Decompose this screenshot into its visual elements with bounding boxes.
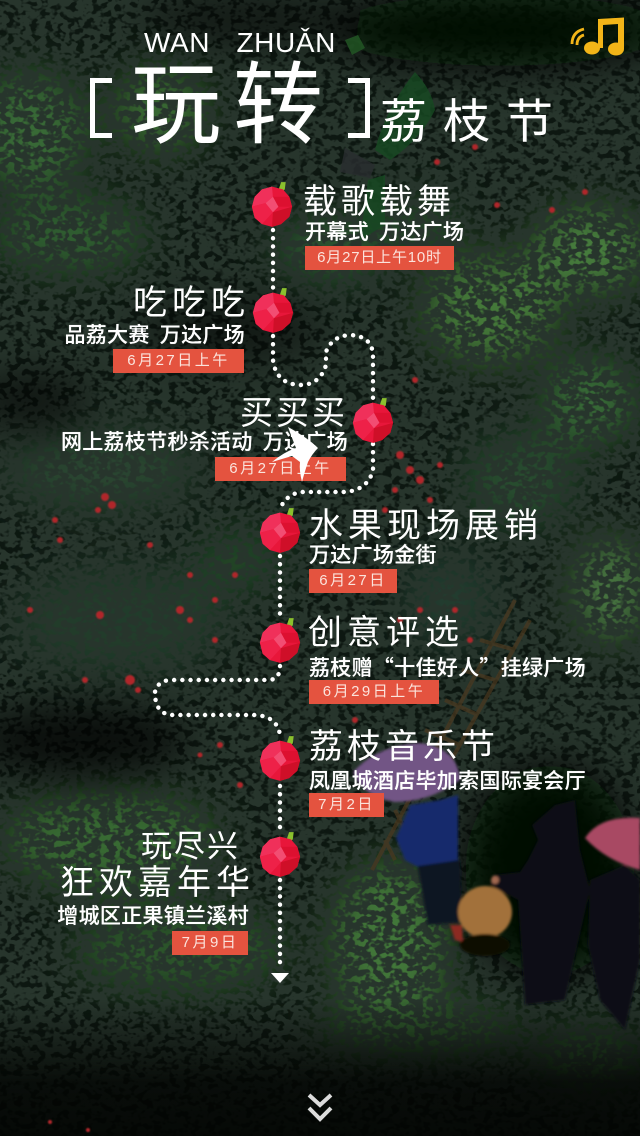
pickers and umbrellas [353,743,640,1030]
lychee icon [260,832,300,877]
lychee icon [260,736,300,781]
event 5 [260,614,586,704]
lychee icon [352,398,394,443]
event date: 6月27日上午 [229,460,332,477]
lychee icon [260,618,300,663]
title: 荔枝节: 荔枝节 [380,95,569,148]
event date [113,349,244,373]
event title: 水果现场展销 [309,507,543,545]
event date [215,457,346,481]
swallow icon [272,427,318,482]
event title: 载歌载舞 [303,183,455,221]
lychee icon [252,288,294,333]
event title: 吃吃吃 [133,284,250,322]
event date: 7月2日 [318,796,375,813]
icon: music note [570,18,624,56]
lychee icon [252,182,292,227]
event 6 [260,728,586,817]
event place: 荔枝赠“十佳好人”挂绿广场 [309,652,586,682]
event 7 [57,829,300,955]
red lychee clusters [27,144,588,1132]
event place: 凤凰城酒店毕加索国际宴会厅 [309,770,586,793]
event place: 万达广场金街 [309,544,437,567]
event date [305,246,454,270]
event place: 开幕式 万达广场 [305,221,464,244]
ladder [372,600,530,870]
event date [309,793,384,817]
event 3 [61,394,394,481]
event date [172,931,248,955]
event date: 7月9日 [182,934,238,951]
event date [309,569,397,593]
event 2 [64,284,294,373]
event title: 荔枝音乐节 [309,728,499,766]
event 1 [252,182,464,270]
event title: 创意评选 [308,614,464,652]
title: left bracket [90,78,112,138]
arrow: route end [271,973,289,983]
lychee icon [260,508,300,553]
event title: 买买买 [240,394,348,431]
event date: 6月29日上午 [323,683,425,700]
event place: 网上荔枝节秒杀活动 万达广场 [61,431,348,454]
event date: 6月27日 [319,572,387,589]
event date [309,680,439,704]
title: 玩转: 玩转 [131,56,335,156]
banana leaves [340,35,435,240]
event title: 玩尽兴 [141,829,240,864]
event place: 品荔大赛 万达广场 [64,324,245,347]
title pinyin: WAN ZHUǍN [144,27,336,58]
event 4 [260,507,543,593]
event title line 2: 狂欢嘉年华 [60,864,255,902]
title: right bracket [348,78,370,138]
icon: scroll down chevrons [308,1094,332,1122]
event place: 增城区正果镇兰溪村 [57,905,249,928]
event date: 6月27日上午10时 [317,249,442,266]
event date: 6月27日上午 [127,352,230,369]
